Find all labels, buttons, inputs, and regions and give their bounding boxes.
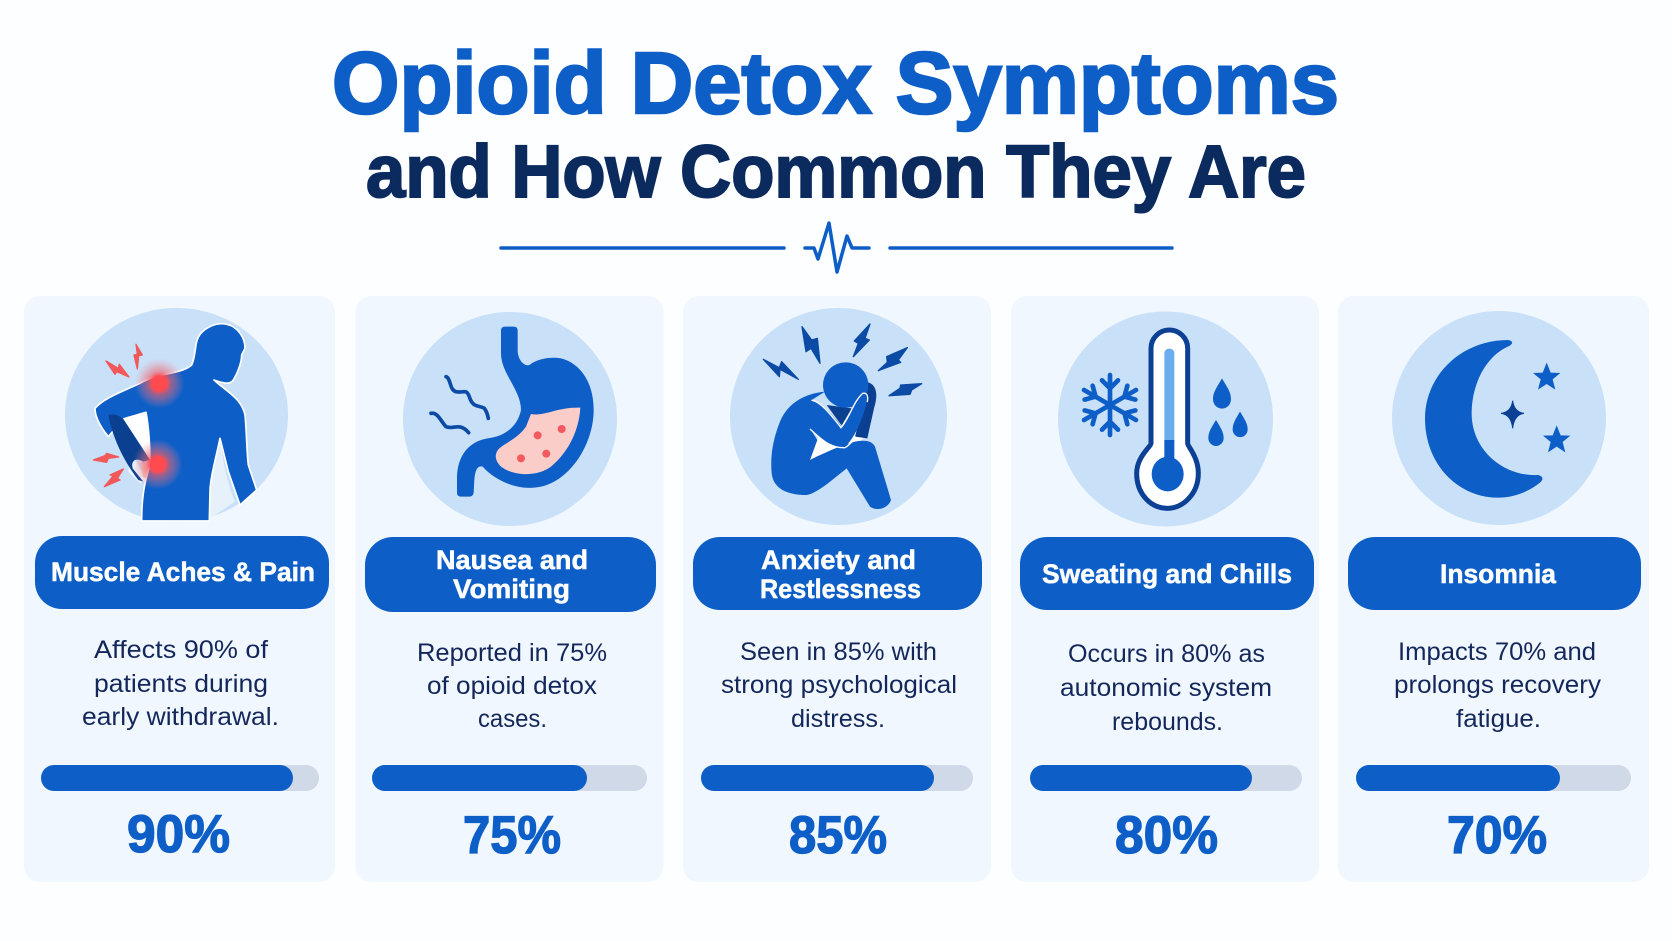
divider with heartbeat icon [501, 223, 1172, 272]
progress bar 90% [41, 765, 319, 791]
description: Reported in 75% [417, 639, 607, 667]
symptom label [365, 537, 656, 612]
description: patients during [94, 670, 268, 698]
description [82, 636, 279, 731]
description [417, 639, 607, 733]
title: Opioid Detox Symptoms [332, 35, 1339, 132]
description: prolongs recovery [1394, 671, 1602, 699]
icon: moon and stars [1392, 311, 1606, 525]
icon: anxious figure [730, 308, 947, 525]
symptom label: Nausea and [436, 545, 588, 575]
symptom label: Vomiting [453, 574, 570, 604]
panel: muscle aches and pain [24, 296, 335, 882]
description: cases. [478, 705, 547, 733]
description: Occurs in 80% as [1068, 640, 1265, 668]
progress bar 85% [701, 765, 973, 791]
description [721, 638, 957, 733]
symptom label: Sweating and Chills [1042, 559, 1292, 589]
panel: sweating and chills [1011, 296, 1319, 882]
description: Affects 90% of [94, 636, 268, 664]
percentage: 85% [789, 806, 887, 865]
symptom label [1348, 537, 1641, 610]
description: strong psychological [721, 671, 957, 699]
symptom label: Insomnia [1440, 559, 1557, 589]
percentage: 80% [1115, 806, 1218, 865]
symptom label [693, 537, 982, 610]
description: fatigue. [1456, 705, 1541, 733]
description [1394, 638, 1602, 733]
progress bar 70% [1356, 765, 1631, 791]
percentage: 75% [463, 806, 561, 865]
description: rebounds. [1112, 708, 1223, 736]
panel: insomnia [1338, 296, 1649, 882]
description: distress. [791, 705, 885, 733]
icon: back pain figure [65, 308, 288, 522]
progress bar 80% [1030, 765, 1302, 791]
description: Impacts 70% and [1398, 638, 1596, 666]
percentage: 90% [127, 805, 230, 864]
symptom label: Muscle Aches & Pain [51, 557, 315, 587]
panel: anxiety and restlessness [683, 296, 991, 882]
icon: thermometer, snowflake and drops [1058, 312, 1273, 526]
percentage: 70% [1447, 806, 1547, 865]
symptom label [1020, 537, 1314, 610]
progress bar 75% [372, 765, 647, 791]
symptom label: Restlessness [760, 574, 921, 604]
symptom label: Anxiety and [761, 545, 916, 575]
panel: nausea and vomiting [356, 296, 664, 882]
title [332, 35, 1339, 213]
description [1060, 640, 1272, 736]
description: early withdrawal. [82, 703, 279, 731]
description: autonomic system [1060, 674, 1272, 702]
description: Seen in 85% with [740, 638, 937, 666]
description: of opioid detox [427, 672, 598, 700]
icon: stomach [403, 312, 617, 526]
title: and How Common They Are [366, 130, 1306, 213]
symptom label [35, 536, 329, 609]
